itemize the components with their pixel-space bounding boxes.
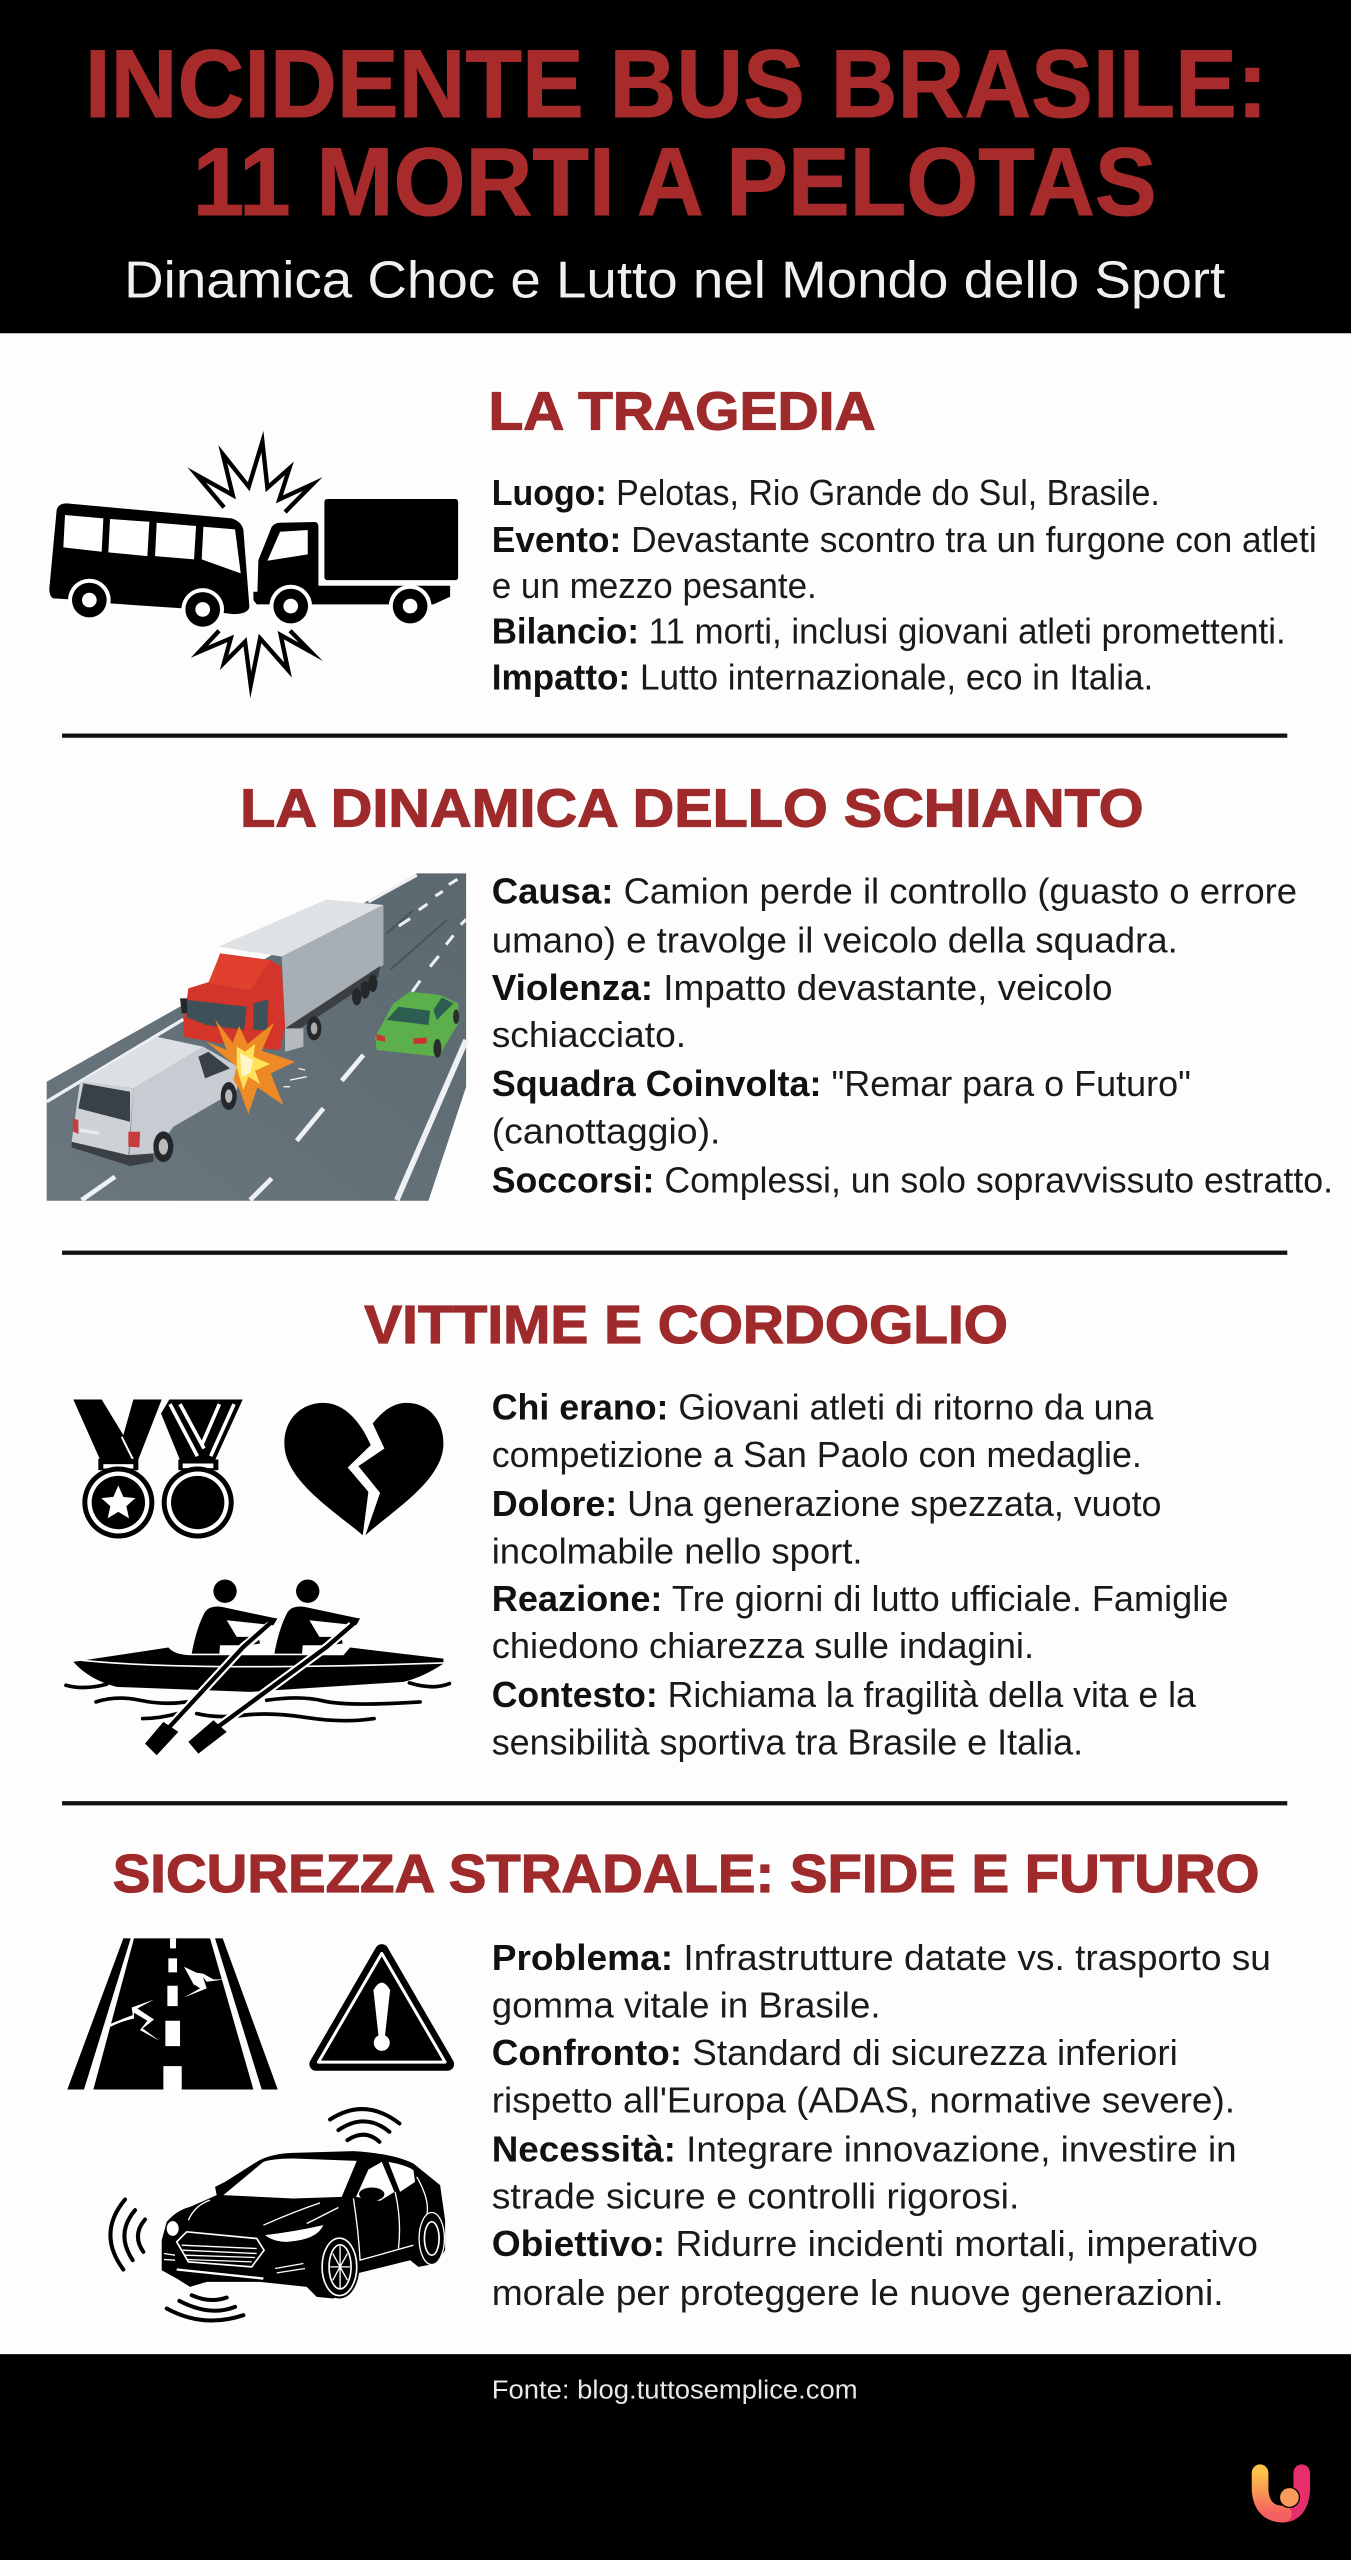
text block: sicurezza: Obiettivo: Ridurre incidenti mortali, imperativo (492, 2223, 1258, 2264)
text block: vittime: Chi erano: Giovani atleti di ritorno da una (492, 1387, 1153, 1428)
text block: vittime: Contesto: Richiama la fragilità della vita e la (492, 1674, 1196, 1715)
icon: bus and truck collision (49, 442, 458, 685)
text block: la dinamica: Soccorsi: Complessi, un solo sopravvissuto estratto. (492, 1160, 1333, 1201)
title: INCIDENTE BUS BRASILE: (85, 31, 1268, 138)
icon: medals (73, 1399, 243, 1539)
panel: la dinamica dello schianto (47, 779, 1333, 1201)
source credit: Fonte: blog.tuttosemplice.com (492, 2374, 858, 2404)
text block: la tragedia (492, 472, 1317, 697)
icon: logo (1260, 2473, 1302, 2514)
text block: vittime (492, 1387, 1228, 1763)
text block: sicurezza: rispetto all'Europa (ADAS, normative severe). (492, 2079, 1235, 2120)
text block: sicurezza: Problema: Infrastrutture datate vs. trasporto su (492, 1937, 1271, 1978)
text block: vittime: chiedono chiarezza sulle indagini. (492, 1625, 1034, 1666)
heading: vittime e cordoglio: VITTIME E CORDOGLIO (364, 1295, 1008, 1355)
title: 11 MORTI A PELOTAS (193, 129, 1157, 236)
text block: vittime: competizione a San Paolo con medaglie. (492, 1434, 1142, 1475)
heading: la dinamica: LA DINAMICA DELLO SCHIANTO (240, 779, 1144, 839)
icon: sensor waves (110, 2109, 399, 2321)
text block: vittime: Dolore: Una generazione spezzata, vuoto (492, 1483, 1162, 1524)
text block: la tragedia: Evento: Devastante scontro tra un furgone con atleti (492, 519, 1317, 560)
text block: sicurezza: Confronto: Standard di sicurezza inferiori (492, 2032, 1178, 2073)
panel: sicurezza stradale (67, 1844, 1271, 2321)
icon: warning triangle (316, 1951, 447, 2064)
text block: la dinamica: (canottaggio). (492, 1111, 720, 1152)
text block: la dinamica: Causa: Camion perde il controllo (guasto o errore (492, 870, 1297, 911)
text block: sicurezza: Necessità: Integrare innovazione, investire in (492, 2128, 1237, 2169)
text block: la dinamica: Violenza: Impatto devastante, veicolo (492, 967, 1112, 1008)
subtitle: Dinamica Choc e Lutto nel Mondo dello Sport (124, 251, 1226, 309)
text block: la dinamica: umano) e travolge il veicolo della squadra. (492, 919, 1178, 960)
heading: sicurezza stradale: SICUREZZA STRADALE: SFIDE E FUTURO (113, 1844, 1260, 1904)
icon: broken heart (284, 1403, 443, 1535)
text block: la dinamica: Squadra Coinvolta: "Remar para o Futuro" (492, 1063, 1191, 1104)
icon: cracked road (67, 1938, 278, 2090)
text block: sicurezza: morale per proteggere le nuove generazioni. (492, 2272, 1224, 2313)
illustration: truck crash on highway (47, 873, 466, 1201)
text block: la dinamica: schiacciato. (492, 1014, 686, 1055)
text block: la dinamica (492, 870, 1333, 1201)
text block: la tragedia: Bilancio: 11 morti, inclusi giovani atleti promettenti. (492, 611, 1286, 652)
text block: la tragedia: Luogo: Pelotas, Rio Grande do Sul, Brasile. (492, 472, 1160, 513)
text block: vittime: Reazione: Tre giorni di lutto ufficiale. Famiglie (492, 1578, 1228, 1619)
text block: la tragedia: Impatto: Lutto internazionale, eco in Italia. (492, 656, 1153, 697)
text block: la tragedia: e un mezzo pesante. (492, 565, 817, 606)
icon: rowing crew (66, 1580, 449, 1755)
header band (0, 0, 1351, 333)
panel: la tragedia (49, 382, 1317, 697)
text block: vittime: sensibilità sportiva tra Brasile e Italia. (492, 1722, 1083, 1763)
icon: smart car (162, 2151, 445, 2299)
panel: vittime e cordoglio (66, 1295, 1228, 1763)
footer band (0, 2354, 1351, 2560)
text block: vittime: incolmabile nello sport. (492, 1530, 863, 1571)
text block: sicurezza (492, 1937, 1271, 2313)
text block: sicurezza: gomma vitale in Brasile. (492, 1985, 881, 2026)
heading: la tragedia: LA TRAGEDIA (488, 382, 876, 442)
title (85, 31, 1268, 236)
text block: sicurezza: strade sicure e controlli rigorosi. (492, 2176, 1019, 2217)
